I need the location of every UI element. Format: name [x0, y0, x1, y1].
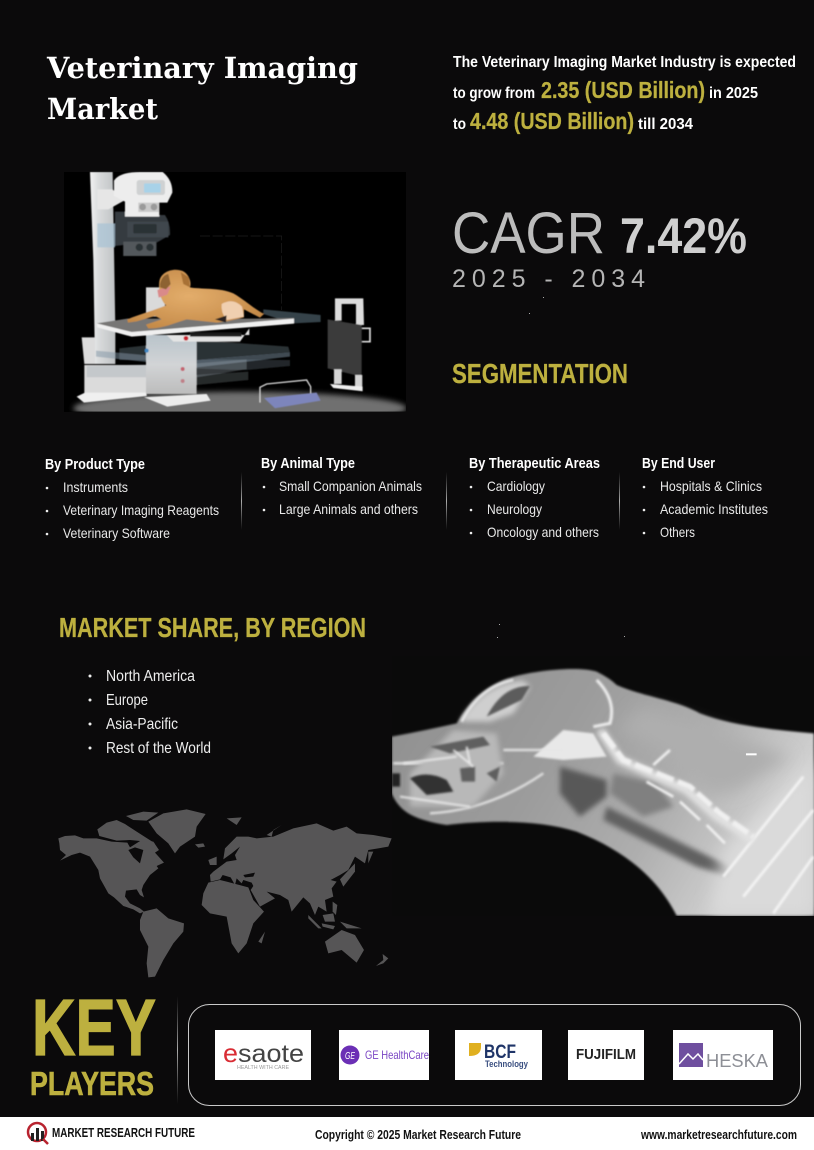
segment: by product type: By Product Type [45, 456, 145, 473]
x-ray tube head [114, 172, 172, 217]
region list: North America [106, 668, 195, 685]
world map [58, 809, 392, 977]
CAGR: 2025 - 2034 [452, 265, 645, 293]
logo: Fujifilm: FUJIFILM [576, 1046, 636, 1063]
logo: Heska: HESKA [706, 1051, 768, 1071]
segment: by end user: By End User [642, 455, 715, 472]
chest [710, 760, 814, 916]
stray dots [497, 297, 625, 638]
CAGR: 7.42% [620, 208, 747, 264]
flat panel detector [335, 298, 364, 325]
spine [600, 730, 753, 840]
region list: Rest of the World [106, 740, 211, 757]
footer: Copyright © 2025 Market Research Future [315, 1127, 521, 1142]
segment: by therapeutic areas [469, 455, 600, 540]
segment: by animal type [261, 455, 422, 517]
heading: market share by region: MARKET SHARE, BY REGION [59, 612, 366, 643]
table top [263, 309, 321, 323]
region list [88, 668, 211, 757]
logo: esaote: e [223, 1038, 238, 1068]
dog [127, 270, 264, 328]
market size statement: 2.35 (USD Billion) [541, 77, 705, 103]
logo: GE HealthCare: GE [345, 1051, 355, 1062]
market size statement: till 2034 [638, 116, 693, 133]
segment: by animal type: Small Companion Animals [279, 478, 422, 494]
table pedestal [146, 335, 197, 394]
logo: GE HealthCare [339, 1030, 429, 1080]
segment: by product type: Veterinary Imaging Reagents [63, 502, 219, 518]
segment: by end user [642, 455, 768, 540]
logo: Heska [673, 1030, 773, 1080]
trachea [603, 807, 730, 877]
CAGR: CAGR [452, 201, 605, 266]
title: Market [47, 92, 159, 126]
skull [460, 681, 530, 722]
neck soft tissue [636, 719, 784, 790]
logo: esaote: HEALTH WITH CARE [237, 1065, 289, 1071]
ghost tube head [115, 212, 170, 256]
key players panel [188, 1004, 800, 1106]
segment: by therapeutic areas: By Therapeutic Areas [469, 455, 600, 472]
market size statement: to grow from [453, 85, 535, 102]
title [46, 51, 358, 126]
segment: by end user: Academic Institutes [660, 501, 768, 517]
footer: MARKET RESEARCH FUTURE [52, 1125, 195, 1140]
column [90, 172, 115, 364]
image: veterinary x-ray machine with dog [64, 172, 407, 425]
segment: by product type: Instruments [63, 479, 128, 495]
logo: BCF Technology: BCF [484, 1042, 516, 1063]
heading: key players: PLAYERS [30, 1065, 154, 1102]
logo: GE HealthCare: GE HealthCare [365, 1048, 429, 1062]
logo: BCF Technology: Technology [485, 1059, 528, 1069]
region list: Europe [106, 692, 148, 709]
market size statement: in 2025 [709, 85, 758, 102]
market size statement: to [453, 116, 466, 133]
segment: by therapeutic areas: Neurology [487, 501, 542, 517]
segment: by product type: Veterinary Software [63, 525, 170, 541]
image: dog neck x-ray [392, 656, 814, 916]
title: Veterinary Imaging [46, 51, 358, 85]
segment: by animal type: By Animal Type [261, 455, 355, 472]
heading: key players [30, 983, 156, 1102]
logo: BCF Technology [455, 1030, 542, 1080]
region list: Asia-Pacific [106, 716, 178, 733]
logo: esaote [215, 1030, 311, 1080]
heading: segmentation: SEGMENTATION [452, 358, 628, 389]
segment: by therapeutic areas: Cardiology [487, 478, 545, 494]
segment: by end user: Others [660, 524, 695, 540]
base [82, 337, 95, 364]
CAGR [452, 201, 747, 293]
segment: by animal type: Large Animals and others [279, 501, 418, 517]
footer [0, 1117, 814, 1150]
ghost table layers [119, 340, 290, 360]
logo: Fujifilm [568, 1030, 644, 1080]
foot pedal [260, 380, 311, 403]
heading: key players: KEY [32, 983, 156, 1072]
segment: by therapeutic areas: Oncology and others [487, 524, 599, 540]
footer logo [28, 1123, 48, 1144]
segment: by product type [45, 456, 219, 541]
segment: by end user: Hospitals & Clinics [660, 478, 762, 494]
market size statement [453, 54, 796, 134]
logo: esaote: saote [238, 1040, 304, 1068]
market size statement: 4.48 (USD Billion) [470, 108, 634, 134]
